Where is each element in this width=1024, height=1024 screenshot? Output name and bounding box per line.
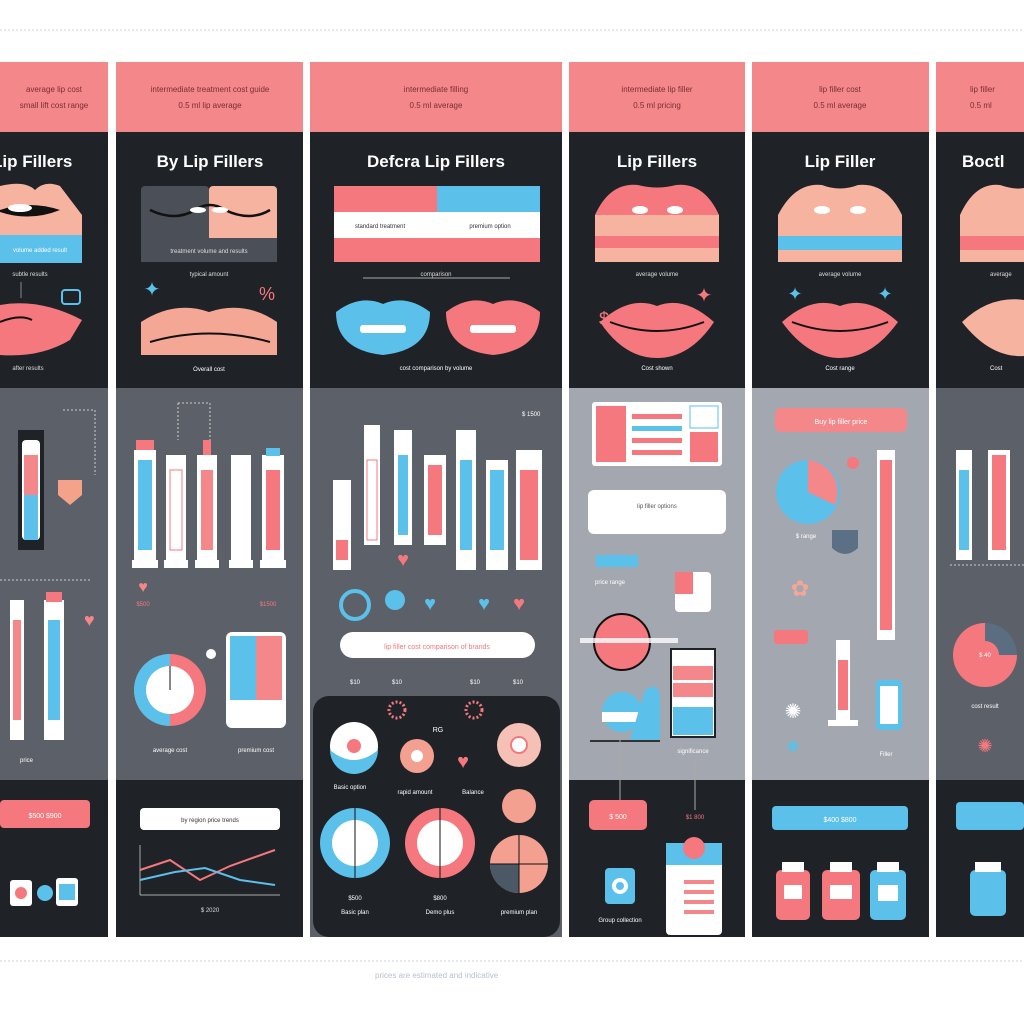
panel: column 1: volume added result <box>13 248 67 254</box>
panel: column 3: intermediate filling <box>404 85 468 94</box>
panel: column 3: Basic option <box>334 785 366 791</box>
panel: column 1: $500 $900 <box>28 813 62 820</box>
panel: column 3 <box>310 62 562 937</box>
panel: column 5: ✿ <box>791 576 809 601</box>
panel: column 6: average <box>990 272 1012 278</box>
panel: column 4: intermediate lip filler <box>621 85 693 94</box>
panel: column 3: Basic plan <box>341 910 369 916</box>
panel: column 6: 0.5 ml <box>970 101 992 110</box>
panel: column 3: comparison <box>420 272 452 278</box>
panel: column 4: average volume <box>636 272 679 278</box>
heading: Lip Filler <box>805 152 876 171</box>
panel: column 4: $1 800 <box>686 815 705 821</box>
panel: column 4: $ 500 <box>609 814 627 821</box>
panel: column 1: average lip cost <box>26 85 83 94</box>
panel: column 2: average cost <box>153 748 188 754</box>
panel: column 2: $500 <box>136 602 150 608</box>
panel: column 2: premium cost <box>238 748 274 754</box>
panel: column 5: ✺ <box>785 701 801 723</box>
panel: column 3: lip filler cost comparison of brands <box>384 644 490 651</box>
panel: column 5: ✦ <box>787 284 803 304</box>
footer text: prices are estimated and indicative <box>375 971 499 980</box>
panel: column 2: % <box>259 284 275 304</box>
panel: column 5: ✦ <box>877 284 893 304</box>
heading: Boctl <box>962 152 1004 171</box>
panel: column 5: Buy lip filler price <box>815 419 868 426</box>
panel: column 2: typical amount <box>190 272 229 278</box>
panel: column 1: ♥ <box>84 610 95 630</box>
panel: column 4: significance <box>677 749 709 755</box>
panel: column 3: ♥ <box>513 593 525 615</box>
panel: column 5: average volume <box>819 272 862 278</box>
panel: column 2: $1500 <box>260 602 277 608</box>
panel: column 3: premium plan <box>501 910 537 916</box>
panel: column 3: ♥ <box>478 593 490 615</box>
panel: column 2: Overall cost <box>193 367 225 373</box>
panel: column 5: ✺ <box>786 739 800 756</box>
panel: column 4: ✦ <box>696 285 712 307</box>
panel: column 4: 0.5 ml pricing <box>633 101 681 110</box>
panel: column 3: $10 <box>470 680 481 686</box>
panel: column 5: $ range <box>796 534 817 540</box>
panel: column 4: $ <box>599 309 609 329</box>
panel: column 4: price range <box>595 580 626 586</box>
panel: column 5: lip filler cost <box>819 85 862 94</box>
panel: column 6: ✺ <box>977 736 993 756</box>
panel: column 1 <box>0 62 108 937</box>
panel: column 3: ♥ <box>457 751 469 773</box>
panel: column 3: $ 1500 <box>522 412 541 418</box>
panel: column 6: cost result <box>971 704 999 710</box>
panel: column 3: premium option <box>469 224 511 230</box>
panel: column 4: Cost shown <box>641 366 673 372</box>
heading: Defcra Lip Fillers <box>367 152 505 171</box>
panel: column 3: cost comparison by volume <box>400 366 473 372</box>
panel: column 5: 0.5 ml average <box>814 101 867 110</box>
panel: column 3: ♥ <box>424 593 436 615</box>
panel: column 3: $10 <box>350 680 361 686</box>
panel: column 4: lip filler options <box>637 504 677 510</box>
panel: column 4: Group collection <box>598 918 642 924</box>
panel: column 2: 0.5 ml lip average <box>178 101 242 110</box>
panel: column 2: ✦ <box>144 279 160 301</box>
panel: column 6: Cost <box>990 366 1003 372</box>
panel: column 3: 0.5 ml average <box>410 101 463 110</box>
panel: column 3: ♥ <box>397 549 409 571</box>
panel: column 2: ♥ <box>138 579 148 596</box>
panel: column 1: subtle results <box>12 272 48 278</box>
panel: column 2: treatment volume and results <box>170 249 248 255</box>
panel: column 5: Filler <box>880 752 893 758</box>
panel: column 3: standard treatment <box>355 224 406 230</box>
panel: column 5 <box>752 62 929 937</box>
panel: column 6: lip filler <box>970 85 995 94</box>
panel: column 5: $400 $800 <box>823 817 857 824</box>
panel: column 2: $ 2020 <box>201 908 220 914</box>
heading: By Lip Fillers <box>157 152 263 171</box>
panel: column 3: $10 <box>513 680 524 686</box>
panel: column 3: Balance <box>462 790 485 796</box>
panel: column 6 <box>936 62 1024 937</box>
panel: column 3: $500 <box>348 896 362 902</box>
panel: column 1: price <box>20 758 34 764</box>
panel: column 4 <box>569 62 745 937</box>
panel: column 1: after results <box>12 366 44 372</box>
panel: column 5: Cost range <box>825 366 855 372</box>
panel: column 3: rapid amount <box>397 790 433 796</box>
panel: column 6: $ 40 <box>979 653 991 659</box>
panel: column 3: Demo plus <box>426 910 454 916</box>
panel: column 3: RG <box>433 727 443 734</box>
panel: column 3: $10 <box>392 680 403 686</box>
heading: Lip Fillers <box>617 152 697 171</box>
syringes <box>132 440 286 568</box>
panel: column 2 <box>116 62 303 937</box>
panel: column 3: $800 <box>433 896 447 902</box>
panel: column 2: intermediate treatment cost guide <box>151 85 270 94</box>
dark comparison box <box>313 696 560 937</box>
panel: column 2: by region price trends <box>181 818 239 824</box>
panel: column 1: small lift cost range <box>20 101 89 110</box>
